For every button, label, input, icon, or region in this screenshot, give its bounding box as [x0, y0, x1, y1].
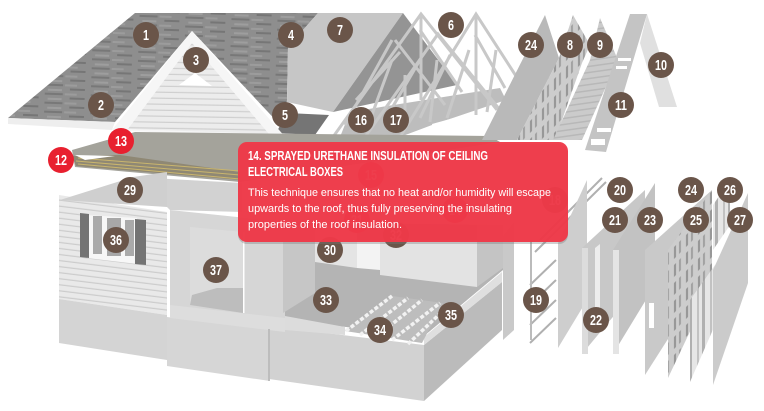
marker 4: 4 [288, 28, 294, 44]
marker 33 [313, 287, 339, 313]
marker 2: 2 [98, 98, 104, 114]
marker 30: 30 [324, 243, 336, 259]
gable end [112, 31, 287, 139]
exploded wall panels [503, 178, 748, 385]
roof underlay strip [276, 113, 329, 135]
number markers [48, 12, 753, 343]
marker 25 [683, 207, 709, 233]
concrete wall block [170, 210, 285, 332]
marker 27: 27 [734, 213, 746, 229]
marker 32: 32 [390, 228, 402, 244]
callout heading [248, 148, 488, 179]
marker 31 [344, 207, 370, 233]
roof shingles [8, 13, 318, 130]
marker 10 [648, 52, 674, 78]
marker 9 [587, 32, 613, 58]
marker 1 [133, 22, 159, 48]
marker 3: 3 [193, 53, 199, 69]
marker 7: 7 [337, 23, 343, 39]
marker 8: 8 [567, 38, 573, 54]
marker 24 top [518, 32, 544, 58]
marker 36: 36 [110, 233, 122, 249]
window [80, 213, 146, 265]
interior room [283, 222, 503, 345]
marker 6 [438, 12, 464, 38]
marker 14 [442, 197, 468, 223]
gable siding panel 9 [553, 18, 618, 140]
marker 2 [88, 92, 114, 118]
marker 32 [383, 222, 409, 248]
gable insulation panel 24 [482, 15, 559, 140]
marker 21: 21 [609, 213, 621, 229]
marker 17 [383, 107, 409, 133]
marker 13 [108, 128, 134, 154]
marker 30 [317, 237, 343, 263]
marker 20 [607, 177, 633, 203]
marker 12: 12 [55, 153, 67, 169]
marker 24 wall [678, 177, 704, 203]
marker 26: 26 [724, 183, 736, 199]
marker 12 [48, 147, 74, 173]
marker 19: 19 [530, 293, 542, 309]
roof trusses [333, 13, 516, 137]
upper floor deck [133, 177, 242, 212]
marker 16 [348, 107, 374, 133]
marker 4 [278, 22, 304, 48]
marker 26 [717, 177, 743, 203]
marker 5 [272, 102, 298, 128]
ceiling insulation slab [72, 132, 500, 182]
marker 3 [183, 47, 209, 73]
marker 8 [557, 32, 583, 58]
marker 18 [542, 187, 568, 213]
marker 14: 14 [449, 203, 461, 219]
callout body text: upwards to the roof, thus fully preserving the insulating [248, 203, 512, 215]
marker 11: 11 [615, 98, 627, 114]
marker 29 [117, 177, 143, 203]
marker 37: 37 [210, 263, 222, 279]
marker 15 [358, 162, 384, 188]
gable vented panel 8 [517, 15, 590, 140]
marker 18: 18 [549, 193, 561, 209]
marker 35 [438, 302, 464, 328]
marker 21 [602, 207, 628, 233]
callout heading: 14. SPRAYED URETHANE INSULATION OF CEILING [248, 148, 488, 163]
marker 27 [727, 207, 753, 233]
callout heading: ELECTRICAL BOXES [248, 164, 343, 179]
marker 24 wall: 24 [685, 183, 697, 199]
concrete foundation [59, 282, 502, 401]
marker 11 [608, 92, 634, 118]
gable ladder and siding panels [585, 14, 677, 152]
marker 36 [103, 227, 129, 253]
marker 23 [637, 207, 663, 233]
marker 20: 20 [614, 183, 626, 199]
callout body text [248, 187, 551, 231]
marker 25: 25 [690, 213, 702, 229]
marker 33: 33 [320, 293, 332, 309]
marker 23: 23 [644, 213, 656, 229]
marker 22: 22 [590, 313, 602, 329]
callout: item 14 description [238, 142, 568, 244]
marker 6: 6 [448, 18, 454, 34]
marker 34: 34 [374, 323, 386, 339]
roof foam deck [287, 13, 403, 112]
marker 15: 15 [365, 168, 377, 184]
callout body text: This technique ensures that no heat and/or humidity will escape [248, 187, 551, 199]
marker 29: 29 [124, 183, 136, 199]
floor joists [345, 296, 444, 344]
marker 5: 5 [282, 108, 288, 124]
marker 13: 13 [115, 134, 127, 150]
marker 22 [583, 307, 609, 333]
callout body text: properties of the roof insulation. [248, 219, 402, 231]
left wall siding [59, 172, 170, 317]
marker 1: 1 [143, 28, 149, 44]
marker 10: 10 [655, 58, 667, 74]
marker 7 [327, 17, 353, 43]
marker 24 top: 24 [525, 38, 537, 54]
marker 16: 16 [355, 113, 367, 129]
marker 31: 31 [351, 213, 363, 229]
marker 19 [523, 287, 549, 313]
marker 9: 9 [597, 38, 603, 54]
marker 37 [203, 257, 229, 283]
marker 35: 35 [445, 308, 457, 324]
marker 17: 17 [390, 113, 402, 129]
marker 34 [367, 317, 393, 343]
